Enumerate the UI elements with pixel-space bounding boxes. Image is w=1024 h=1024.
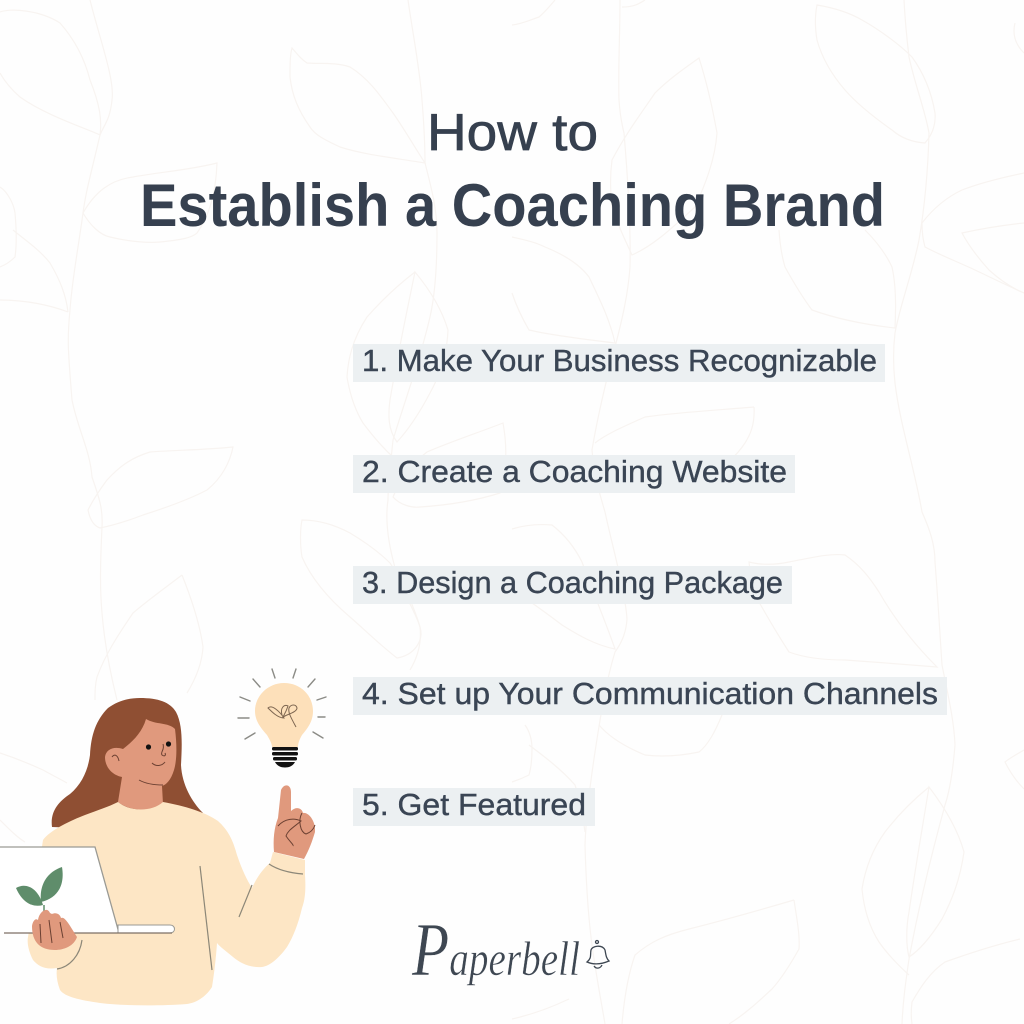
illustration: woman with laptop and plant [0, 698, 315, 1005]
title line: How to: How to [427, 104, 598, 162]
step 3: 3. Design a Coaching Package [362, 565, 783, 600]
sweater folds [57, 864, 303, 970]
logo: Paperbell: Paperbell [411, 908, 580, 992]
pointing hand [274, 785, 315, 859]
step 5: 5. Get Featured [362, 787, 586, 822]
sweater [28, 802, 305, 1005]
step 2: 2. Create a Coaching Website [362, 454, 787, 489]
step 1: 1. Make Your Business Recognizable [362, 343, 877, 378]
hand holding plant [32, 910, 77, 950]
bulb filament [268, 705, 297, 727]
facial features [112, 741, 171, 785]
step 4: 4. Set up Your Communication Channels [362, 676, 938, 711]
icon: bell [587, 940, 609, 968]
bulb base [272, 747, 298, 768]
icon: light bulb [238, 669, 326, 768]
title [140, 104, 885, 239]
bulb rays [238, 669, 326, 739]
title line: Establish a Coaching Brand: Establish a Coaching Brand [140, 172, 885, 239]
laptop base [118, 925, 174, 933]
plant leaves [16, 867, 63, 916]
list of five steps [353, 343, 947, 826]
laptop screen [0, 847, 119, 933]
neck and face [105, 719, 176, 810]
hair [52, 698, 203, 830]
